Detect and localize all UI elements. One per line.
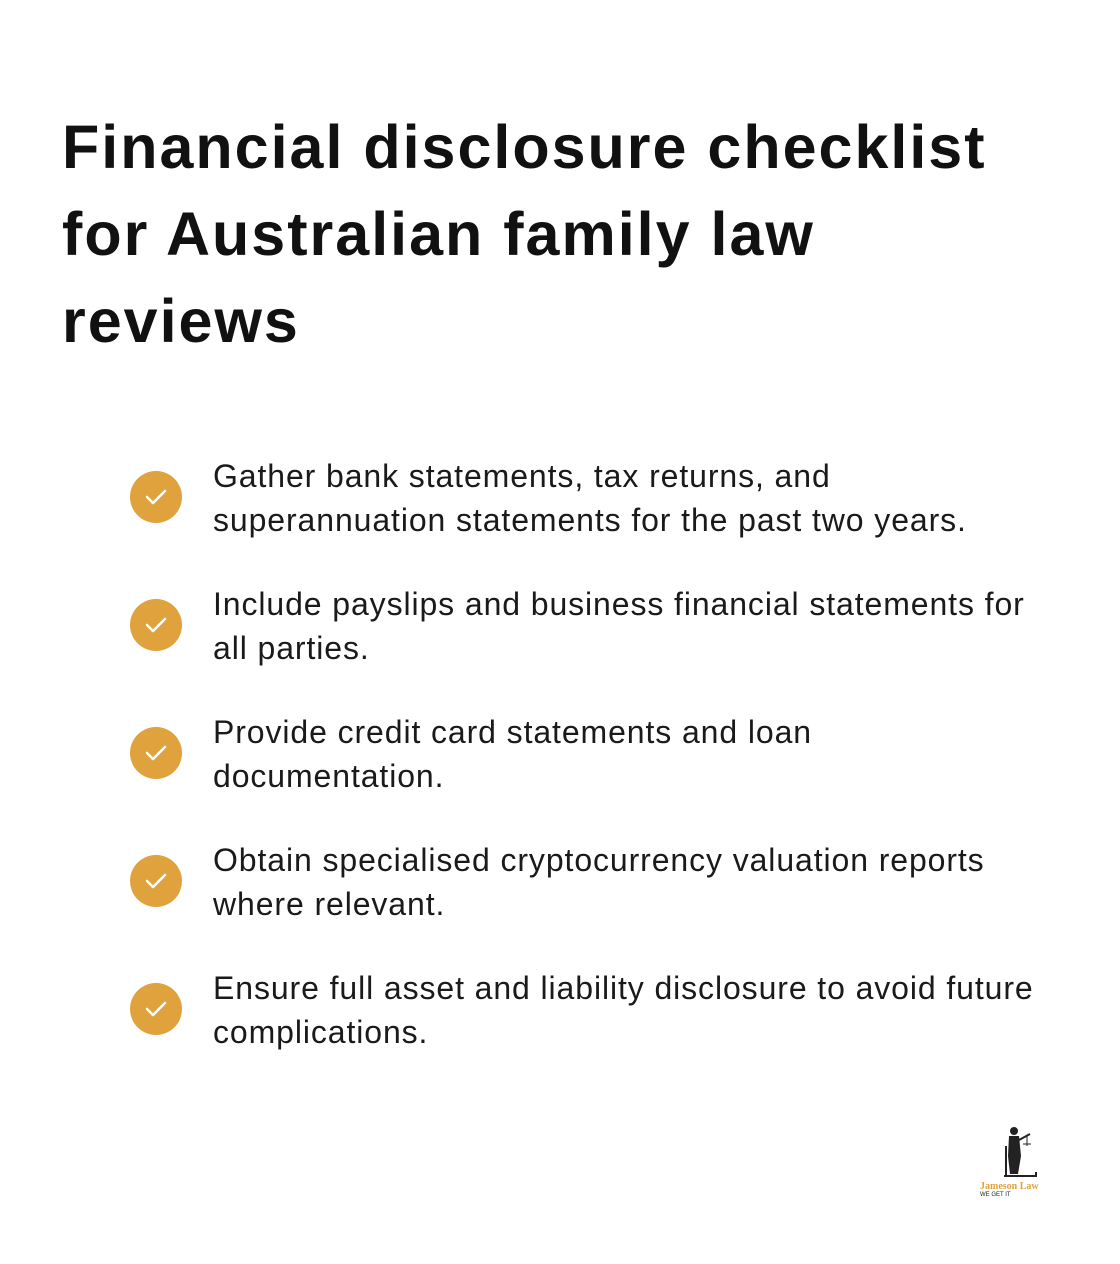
text bbox=[213, 458, 967, 538]
item 5 bbox=[130, 970, 1034, 1050]
item 1 bbox=[130, 458, 967, 538]
text: Obtain specialised cryptocurrency valuation reports bbox=[213, 842, 985, 878]
icon: justice figure bbox=[1004, 1127, 1037, 1177]
icon: check bbox=[130, 727, 182, 779]
text: Include payslips and business financial statements for bbox=[213, 586, 1025, 622]
text: complications. bbox=[213, 1014, 428, 1050]
text: where relevant. bbox=[213, 886, 445, 922]
icon: check bbox=[130, 983, 182, 1035]
logo text: Jameson Law bbox=[980, 1181, 1039, 1192]
text: Gather bank statements, tax returns, and bbox=[213, 458, 831, 494]
icon: check bbox=[130, 471, 182, 523]
text bbox=[213, 586, 1025, 666]
logo: WE GET IT bbox=[980, 1192, 1011, 1198]
item 2 bbox=[130, 586, 1025, 666]
item 3 bbox=[130, 714, 812, 794]
item 4 bbox=[130, 842, 985, 922]
text bbox=[213, 842, 985, 922]
icon: check bbox=[130, 599, 182, 651]
text: Ensure full asset and liability disclosure to avoid future bbox=[213, 970, 1034, 1006]
text: all parties. bbox=[213, 630, 370, 666]
logo bbox=[980, 1127, 1039, 1198]
text: superannuation statements for the past two years. bbox=[213, 502, 967, 538]
text bbox=[213, 714, 812, 794]
text: Provide credit card statements and loan bbox=[213, 714, 812, 750]
text bbox=[213, 970, 1034, 1050]
text: documentation. bbox=[213, 758, 444, 794]
title: Financial disclosure checklist for Australian family law reviews bbox=[62, 113, 987, 355]
icon: check bbox=[130, 855, 182, 907]
